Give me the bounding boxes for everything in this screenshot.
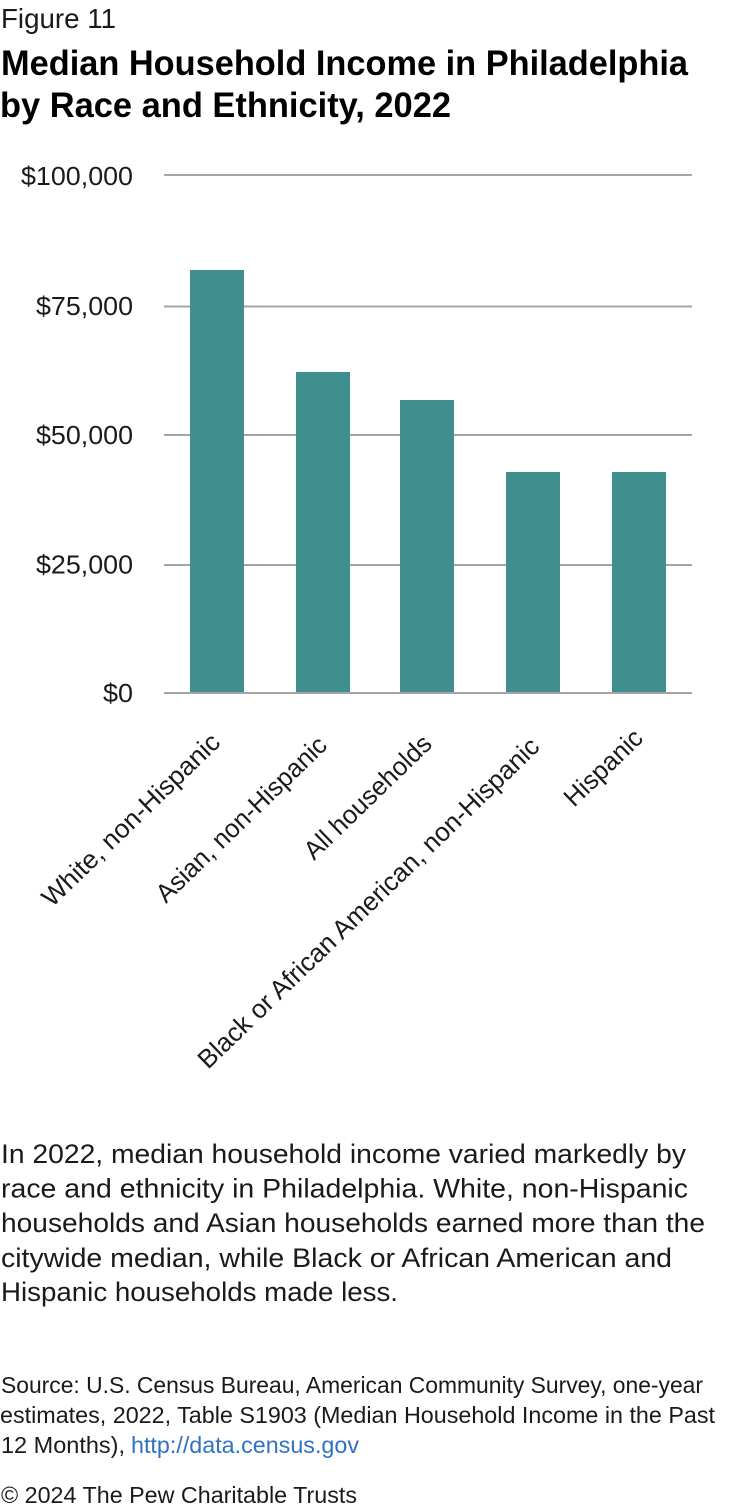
description text: households and Asian households earned more than the	[1, 1208, 705, 1238]
source note: Source: U.S. Census Bureau, American Community Survey, one-year	[1, 1372, 703, 1398]
copyright: © 2024 The Pew Charitable Trusts	[1, 1482, 357, 1508]
y-axis labels: $25,000	[36, 550, 133, 580]
figure label: Figure 11	[1, 3, 116, 34]
description text: Hispanic households made less.	[1, 1277, 398, 1307]
gridlines	[164, 175, 692, 693]
y-axis labels: $0	[103, 678, 133, 708]
description text: In 2022, median household income varied markedly by	[1, 1139, 687, 1169]
title	[0, 44, 689, 125]
category labels: White, non-Hispanic	[35, 727, 226, 912]
description text: race and ethnicity in Philadelphia. White, non-Hispanic	[1, 1174, 688, 1204]
source note: 12 Months),	[1, 1432, 125, 1458]
description text	[1, 1139, 705, 1307]
title: by Race and Ethnicity, 2022	[0, 86, 451, 125]
y-axis labels: $75,000	[36, 291, 133, 321]
category labels: All households	[297, 728, 438, 865]
category labels: Asian, non-Hispanic	[149, 730, 333, 908]
description text: citywide median, while Black or African American and	[1, 1243, 672, 1273]
source note: estimates, 2022, Table S1903 (Median Household Income in the Past	[0, 1402, 716, 1428]
title: Median Household Income in Philadelphia	[1, 44, 689, 83]
category labels: Black or African American, non-Hispanic	[191, 731, 545, 1074]
bars	[190, 270, 666, 692]
y-axis labels	[21, 161, 133, 708]
source note: http://data.census.gov	[131, 1432, 359, 1458]
y-axis labels: $100,000	[21, 161, 133, 191]
source note	[0, 1372, 716, 1458]
bar chart	[21, 161, 692, 1074]
y-axis labels: $50,000	[36, 420, 133, 450]
category labels	[35, 723, 649, 1074]
category labels: Hispanic	[557, 723, 649, 812]
